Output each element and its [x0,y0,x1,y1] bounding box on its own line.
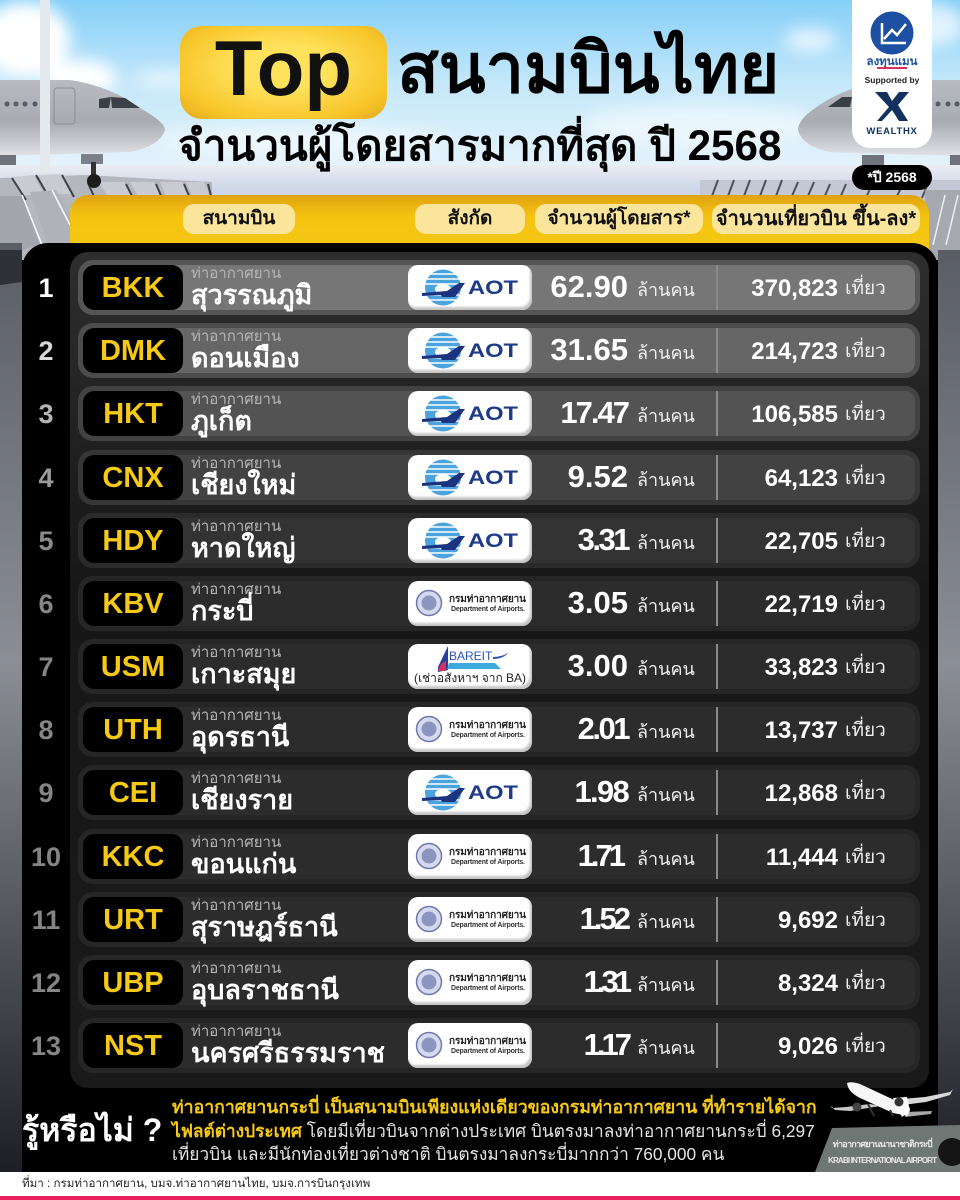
row 11 URT: 1.52 [580,901,628,936]
row 5 HDY: AOT [468,531,518,552]
row 2 DMK: ท่าอากาศยาน [191,328,281,345]
row 3 HKT: ภูเก็ต [191,406,252,436]
row 1 BKK: 62.90 [550,269,628,304]
row 9 CEI: 9 [38,778,54,808]
title: Thai airports: สนามบินไทย [397,30,779,107]
row 13 NST: 13 [31,1031,61,1061]
row 3 HKT: ท่าอากาศยาน [191,391,281,408]
row 5 HDY: หาดใหญ่ [191,533,295,563]
row 12 UBP: เที่ยว [845,973,886,994]
row 6 KBV: KBV [102,588,164,620]
row 7 USM: BAREIT [449,649,493,663]
row 9 CEI [38,765,920,820]
row 6 KBV: Department of Airports. [451,606,525,613]
row 4 CNX: 9.52 [568,458,628,494]
row 4 CNX: เที่ยว [845,468,886,488]
row 6 KBV [38,576,920,631]
row 11 URT: URT [103,904,163,936]
row 1 BKK: BKK [102,272,164,304]
row 2 DMK: 31.65 [550,332,628,367]
row 3 HKT: HKT [103,398,163,430]
row 11 URT: 11 [32,905,60,935]
row 12 UBP: 1.31 [584,964,628,999]
icon: chart logo [870,12,914,54]
row 5 HDY: เที่ยว [845,531,886,552]
row 11 URT: Department of Airports. [451,922,525,929]
row 2 DMK: 214,723 [751,338,838,365]
row 1 BKK: เที่ยว [845,278,886,299]
row 2 DMK: ดอนเมือง [191,343,300,373]
row 7 USM: USM [101,651,165,683]
row 10 KKC: KKC [102,840,164,872]
row 6 KBV: 22,719 [765,591,838,618]
callout text [170,1094,817,1164]
row 8 UTH: กรมท่าอากาศยาน [449,719,526,731]
row 12 UBP: Department of Airports. [451,985,525,992]
row 12 UBP [31,955,920,1010]
row 8 UTH [38,702,920,757]
row 13 NST: กรมท่าอากาศยาน [449,1035,526,1047]
row 9 CEI: ล้านคน [637,785,695,805]
row 7 USM: เกาะสมุย [191,659,296,689]
row 3 HKT: 106,585 [751,401,838,428]
row 4 CNX: CNX [102,462,164,494]
row 1 BKK: AOT [468,278,518,299]
row 7 USM [38,639,920,694]
pink footer strip [0,1196,960,1200]
row 7 USM: (เช่าอสังหาฯ จาก BA) [414,671,526,685]
row 5 HDY: 3.31 [578,522,628,557]
row 13 NST: Department of Airports. [451,1048,525,1055]
row 10 KKC: Department of Airports. [451,858,525,866]
row 13 NST: ล้านคน [637,1038,695,1058]
right plane [798,80,960,156]
row 10 KKC: กรมท่าอากาศยาน [449,846,526,858]
subtitle: จำนวนผู้โดยสารมากที่สุด ปี 2568 [178,122,781,169]
row 9 CEI: CEI [109,777,157,809]
callout heading: did you know: รู้หรือไม่ ? [22,1112,162,1148]
row 3 HKT: 3 [38,399,54,429]
row 4 CNX: ล้านคน [637,470,695,490]
row 8 UTH: อุดรธานี [191,722,289,752]
row 5 HDY: 22,705 [765,528,838,555]
row 4 CNX: 4 [38,462,54,492]
row 6 KBV: กระบี่ [191,596,254,626]
callout text: ท่าอากาศยานกระบี่ เป็นสนามบินเพียงแห่งเดียวของกรมท่าอากาศยาน ที่ทำรายได้จาก [172,1097,817,1117]
row 11 URT: ท่าอากาศยาน [191,897,281,914]
row 10 KKC: เที่ยว [845,846,886,868]
panel: inner dark table [70,252,929,1088]
row 1 BKK: 1 [38,273,54,303]
row 8 UTH: Department of Airports. [451,732,525,739]
row 10 KKC: 10 [31,842,61,872]
row 6 KBV: 6 [38,589,54,619]
row 10 KKC: ล้านคน [637,848,695,868]
illustration: plane and Krabi airport sign [815,1082,960,1172]
year tag [852,165,932,190]
row 12 UBP: ท่าอากาศยาน [191,960,281,977]
row 9 CEI: AOT [468,783,518,804]
year tag: *ปี 2568 [867,169,917,185]
row 10 KKC: ขอนแก่น [191,848,296,878]
row 10 KKC: ท่าอากาศยาน [191,834,281,850]
row 5 HDY: ล้านคน [637,533,695,553]
header: airport [183,204,295,234]
row 13 NST: เที่ยว [845,1036,886,1057]
row 5 HDY [38,513,920,568]
row 10 KKC [31,829,920,884]
illustration: plane and Krabi airport sign: ท่าอากาศยานนานาชาติกระบี่ [833,1137,933,1149]
row 8 UTH: 2.01 [578,711,628,746]
row 5 HDY: 5 [38,526,54,556]
row 3 HKT: AOT [468,404,518,425]
row 1 BKK: สุวรรณภูมิ [191,280,312,310]
row 11 URT: เที่ยว [845,910,886,931]
row 12 UBP: 12 [31,968,61,998]
icon: WealthX X mark [875,92,909,121]
supported by: Supported by [865,75,919,85]
row 7 USM: 3.00 [568,648,628,683]
row 2 DMK: AOT [468,341,518,362]
row 2 DMK: ล้านคน [637,343,695,363]
row 13 NST: 1.17 [584,1027,628,1062]
row 8 UTH: 13,737 [765,717,838,744]
row 13 NST [31,1018,920,1073]
logo card: Longtunman and WealthX [852,0,932,148]
seats left [0,175,212,260]
row 11 URT: 9,692 [778,907,838,934]
header: affiliation [415,204,525,234]
brand name: ลงทุนแมน [867,56,917,68]
row 9 CEI: ท่าอากาศยาน [191,770,281,787]
row 6 KBV: 3.05 [568,585,628,620]
row 4 CNX: AOT [468,468,518,488]
row 8 UTH: ท่าอากาศยาน [191,707,281,724]
row 4 CNX: เชียงใหม่ [191,470,296,500]
row 13 NST: 9,026 [778,1033,838,1060]
row 7 USM: 7 [38,652,54,682]
illustration: plane and Krabi airport sign: KRABI INTERNATIONAL AIRPORT [828,1156,937,1165]
row 10 KKC: 1.71 [578,838,622,872]
row 13 NST: NST [104,1030,162,1062]
seats right [700,180,960,205]
row 5 HDY: HDY [102,525,164,557]
row 7 USM: ท่าอากาศยาน [191,644,281,661]
source bar [0,1172,960,1196]
row 11 URT: กรมท่าอากาศยาน [449,909,526,921]
panel: black table background [22,243,938,1173]
callout text: เที่ยวบิน และมีนักท่องเที่ยวต่างชาติ บินตรงมาลงกระบี่มากกว่า 760,000 คน [172,1144,724,1164]
header: flights: จำนวนเที่ยวบิน ขึ้น-ลง* [716,208,916,230]
row 12 UBP: 8,324 [778,970,838,997]
row 4 CNX [38,450,920,505]
title pill: Top [180,26,387,119]
header: airport: สนามบิน [203,208,275,229]
row 2 DMK: DMK [100,335,166,367]
row 13 NST: นครศรีธรรมราช [191,1038,385,1068]
row 8 UTH: ล้านคน [637,722,695,742]
row 3 HKT [38,386,920,441]
row 12 UBP: อุบลราชธานี [191,975,339,1005]
wealthx wordmark: WEALTHX [866,126,918,137]
row 2 DMK [38,323,920,378]
row 2 DMK: 2 [38,336,54,366]
row 5 HDY: ท่าอากาศยาน [191,518,281,535]
row 9 CEI: 12,868 [765,780,838,807]
row 2 DMK: เที่ยว [845,341,886,362]
row 8 UTH: เที่ยว [845,720,886,741]
left plane [0,80,165,156]
row 7 USM: เที่ยว [845,657,886,678]
row 9 CEI: เชียงราย [191,785,293,815]
title pill: Top: Top [215,24,352,112]
row 8 UTH: 8 [38,715,54,745]
row 12 UBP: ล้านคน [637,975,695,995]
row 4 CNX: 64,123 [765,464,838,492]
row 6 KBV: ท่าอากาศยาน [191,581,281,598]
row 1 BKK [38,260,920,315]
callout text: ไฟลต์ต่างประเทศ โดยมีเที่ยวบินจากต่างประเทศ บินตรงมาลงท่าอากาศยานกระบี่ 6,297 [172,1120,815,1140]
row 9 CEI: เที่ยว [845,783,886,804]
landing gear [81,154,103,164]
row 1 BKK: ท่าอากาศยาน [191,265,281,282]
row 13 NST: ท่าอากาศยาน [191,1023,281,1040]
row 12 UBP: กรมท่าอากาศยาน [449,972,526,984]
row 10 KKC: 11,444 [766,844,838,870]
row 12 UBP: UBP [102,967,164,999]
row 11 URT: สุราษฎร์ธานี [191,912,338,942]
row 1 BKK: 370,823 [751,275,838,302]
row 6 KBV: ล้านคน [637,596,695,616]
row 11 URT: ล้านคน [637,912,695,932]
row 4 CNX: ท่าอากาศยาน [191,454,281,472]
row 8 UTH: UTH [103,714,163,746]
row 3 HKT: ล้านคน [637,406,695,426]
row 6 KBV: เที่ยว [845,594,886,615]
header: passengers: จำนวนผู้โดยสาร* [547,208,691,229]
row 9 CEI: 1.98 [574,774,628,809]
row 11 URT [32,892,920,947]
source bar: ที่มา : กรมท่าอากาศยาน, บมจ.ท่าอากาศยานไทย, บมจ.การบินกรุงเทพ [22,1177,370,1190]
row 1 BKK: ล้านคน [637,280,695,300]
row 3 HKT: เที่ยว [845,404,886,425]
header: passengers [535,204,703,234]
header: affiliation: สังกัด [448,208,492,229]
panel: gold header band [70,195,929,255]
row 3 HKT: 17.47 [560,395,628,430]
row 7 USM: 33,823 [765,654,838,681]
row 6 KBV: กรมท่าอากาศยาน [449,593,526,605]
row 7 USM: ล้านคน [637,659,695,679]
